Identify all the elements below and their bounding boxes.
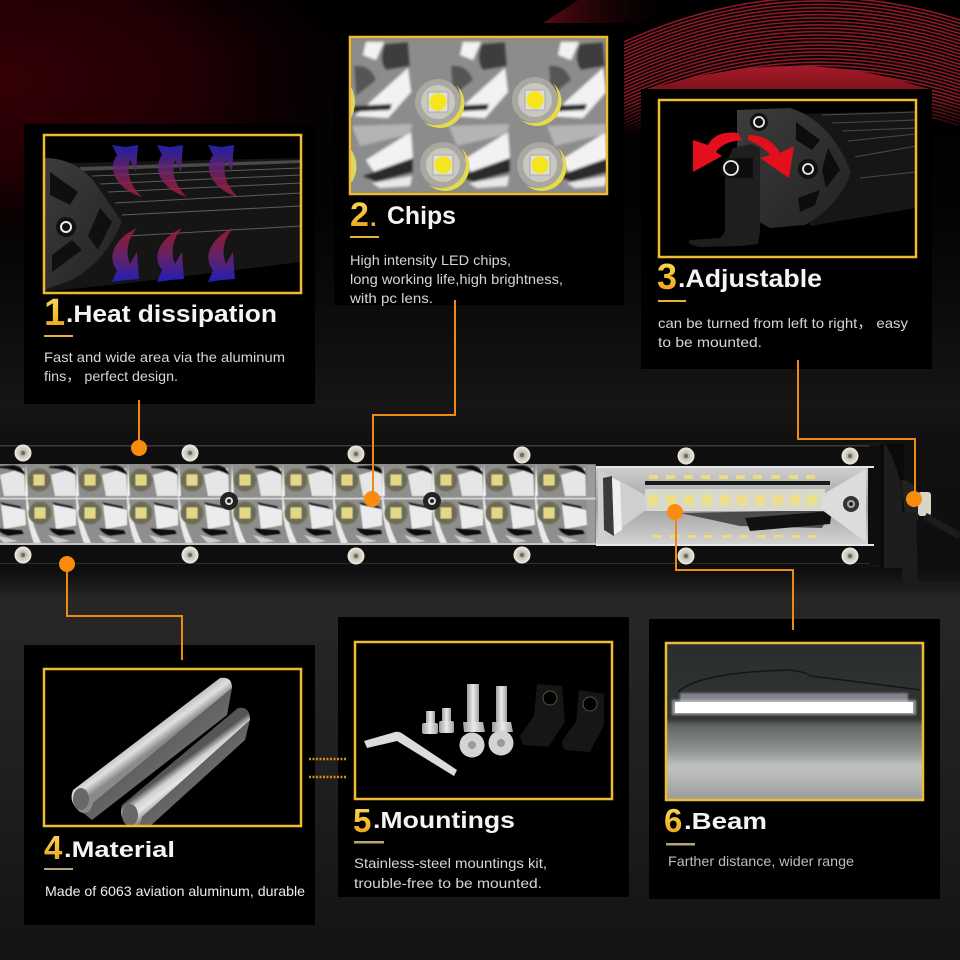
mounting bolts: [14, 444, 858, 564]
description: long working life,high brightness,: [350, 271, 563, 287]
heading: .Adjustable: [678, 265, 822, 293]
panel: mountings: [338, 617, 629, 897]
long bolts: [463, 684, 513, 732]
panel: heat dissipation: [24, 124, 315, 404]
description: Farther distance, wider range: [668, 853, 854, 869]
dot: chips: [364, 491, 380, 507]
description: with pc lens.: [349, 290, 433, 306]
photo: mounting kit: [364, 684, 604, 776]
heading: 4: [44, 829, 63, 866]
red arrows: [693, 132, 794, 178]
bar housing: [0, 446, 880, 566]
nuts: [460, 730, 514, 758]
hex key: [364, 732, 457, 776]
description: can be turned from left to right， easy: [658, 315, 908, 331]
small screws: [422, 708, 454, 734]
description: fins， perfect design.: [44, 368, 178, 384]
description: Stainless-steel mountings kit,: [354, 855, 547, 871]
description: Made of 6063 aviation aluminum, durable: [45, 883, 305, 899]
panel: beam: [649, 619, 940, 899]
red arcs: [624, 0, 960, 147]
heading: [353, 802, 515, 839]
bracket: [688, 144, 760, 247]
heading: [350, 196, 456, 234]
dot: material: [59, 556, 75, 572]
heading: [44, 292, 277, 334]
photo: LED chips macro: [350, 37, 608, 194]
description: High intensity LED chips,: [350, 252, 511, 268]
heading: 3: [657, 256, 677, 297]
heading: 5: [353, 802, 371, 839]
connector lines: [67, 300, 915, 777]
description: Fast and wide area via the aluminum: [44, 349, 285, 365]
photo: light bar beam on wall: [667, 644, 922, 799]
panel: adjustable: [641, 89, 932, 369]
heading: .Material: [64, 837, 175, 862]
heading: 6: [664, 802, 682, 839]
heat arrows: [112, 145, 238, 282]
heading: .: [370, 205, 377, 232]
combo section: [596, 466, 874, 546]
dot: beam: [667, 504, 683, 520]
description: [349, 252, 563, 306]
description: [354, 855, 547, 891]
description: to be mounted.: [658, 334, 762, 350]
dot: heat dissipation: [131, 440, 147, 456]
light bar: [0, 442, 960, 585]
heading: [657, 256, 822, 297]
brackets: [520, 684, 604, 752]
photo: bar fins with heat arrows: [44, 145, 301, 292]
description: [658, 315, 908, 350]
heading: Chips: [387, 202, 456, 230]
panel: chips: [334, 25, 624, 306]
heading: .Mountings: [373, 807, 515, 833]
photo: mounting bracket with rotation arrows: [688, 108, 916, 247]
heading: 2: [350, 196, 369, 234]
description: trouble-free to be mounted.: [354, 875, 542, 891]
heading: [664, 802, 767, 839]
reflector strip: [0, 463, 596, 544]
photo: aluminum profiles: [72, 678, 250, 828]
heading: .Beam: [684, 808, 767, 834]
heading: .Heat dissipation: [66, 301, 277, 328]
dot: adjustable: [906, 491, 922, 507]
red wedge: [543, 0, 680, 23]
heading: [44, 829, 175, 866]
end cap and bracket: [850, 442, 960, 585]
description: [44, 349, 285, 384]
panel: material: [24, 645, 315, 925]
heading: 1: [44, 292, 65, 334]
